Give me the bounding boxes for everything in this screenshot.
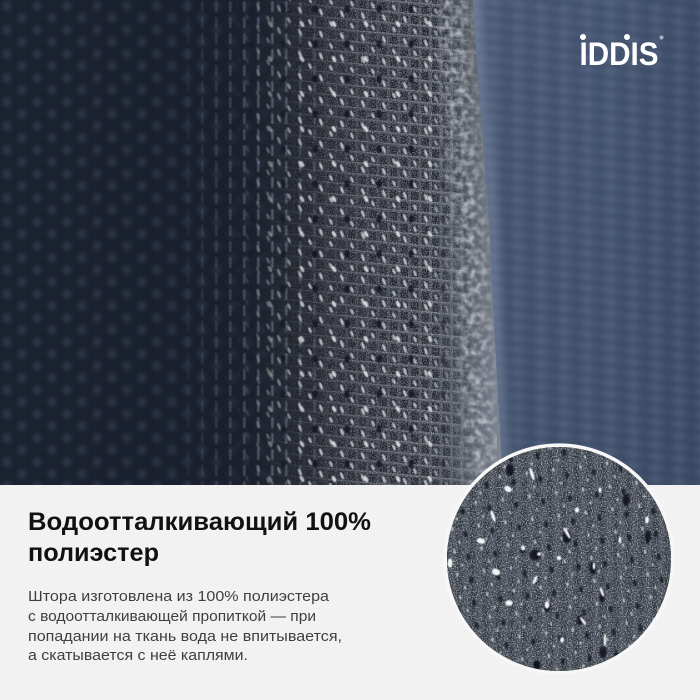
heading: полиэстер [28, 539, 159, 567]
text block: description [28, 588, 342, 664]
text block: description: с водоотталкивающей пропиткой — при [28, 608, 316, 625]
text block: description: попадании на ткань вода не впитывается, [28, 628, 342, 645]
text block: description: а скатывается с неё каплями. [28, 647, 248, 664]
heading [28, 508, 371, 567]
panel: text background [0, 485, 700, 700]
callout: magnified fabric circle [447, 443, 671, 671]
panel: curtain fabric photo [0, 0, 700, 495]
icon: logo i dots [580, 34, 630, 40]
text block: description: Штора изготовлена из 100% полиэстера [28, 588, 330, 605]
logo: iddis: IDDIS [580, 36, 658, 72]
heading: Водоотталкивающий 100% [28, 508, 371, 536]
